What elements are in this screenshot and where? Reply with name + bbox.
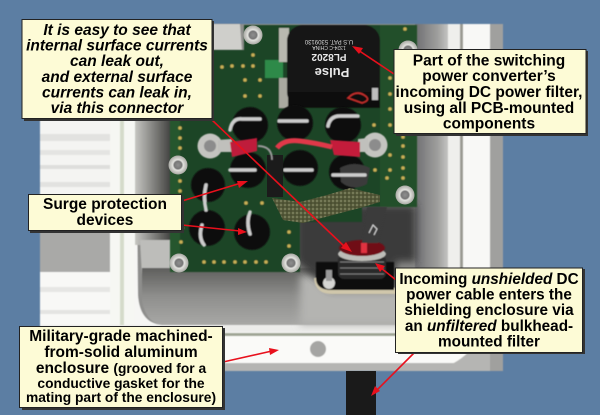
callout: military-grade enclosure: conductive gasket for the (37, 376, 205, 391)
arrow: surge callout to lower capacitor (182, 225, 247, 235)
callout: switching power converter filter: using all PCB-mounted (404, 100, 574, 117)
callout: military-grade enclosure: Military-grade machined- (29, 328, 213, 345)
callout: internal and external surface currents: currents can leak in, (42, 84, 192, 102)
solder pads (178, 27, 407, 264)
callout: surge protection devices: devices (77, 212, 133, 229)
photo: red power wire with ring terminals (198, 132, 388, 160)
arrow: enclosure callout to rim (223, 348, 279, 362)
callout: switching power converter filter (394, 50, 588, 136)
choke markings (304, 38, 353, 80)
callout: internal and external surface currents: and external surface (42, 69, 193, 86)
right rim (448, 24, 460, 324)
callout: surge protection devices: Surge protection (43, 196, 167, 213)
callout: unshielded DC power cable: mounted filter (438, 334, 540, 350)
bottom rim (40, 325, 490, 332)
choke markings: U.S PAT. 5309130 (304, 38, 353, 44)
photo: board mount screws (168, 26, 418, 272)
callout: internal and external surface currents: It is easy to see that (43, 22, 191, 39)
arrow: cable callout to cable (371, 353, 414, 396)
callout: surge protection devices (28, 194, 184, 233)
photo: braided ground strap (272, 188, 380, 223)
photo: top-left bracket (212, 24, 242, 50)
photo: bulkhead connector (314, 207, 400, 294)
callout: internal and external surface currents: can leak out, (70, 53, 164, 70)
callout: switching power converter filter: Part of the switching (413, 52, 565, 70)
choke markings: Pulse (315, 65, 349, 80)
choke markings: 1324-C CHINA (312, 44, 346, 50)
rim peg (310, 341, 326, 357)
photo: floor near connector (300, 275, 420, 325)
photo: aluminum enclosure (40, 24, 503, 371)
callout: unshielded DC power cable: Incoming unshielded DC (399, 271, 579, 288)
photo: black wire sleeve (267, 155, 283, 197)
cavity (135, 24, 440, 325)
callout: military-grade enclosure: mating part of the enclosure) (26, 390, 216, 405)
callout: unshielded DC power cable: power cable enters the (406, 286, 572, 304)
left rim (110, 120, 135, 325)
left flange stripes (40, 120, 112, 325)
callout: switching power converter filter: incoming DC power filter, (396, 84, 582, 101)
callout: military-grade enclosure (20, 326, 225, 410)
arrow: filter callout to choke (352, 46, 394, 74)
callout: unshielded DC power cable: an unfiltered bulkhead- (405, 318, 573, 335)
arrows (182, 46, 414, 396)
arrow: surge callout to upper capacitor (182, 181, 248, 201)
choke markings: PL8202 (311, 51, 347, 62)
callout: military-grade enclosure: from-solid aluminum (44, 344, 198, 361)
photo: external power cable (346, 371, 376, 415)
callout: military-grade enclosure: enclosure (grooved for a (36, 360, 206, 377)
photo: circuit board (170, 25, 417, 272)
callout: internal and external surface currents: via this connector (51, 100, 184, 117)
callout: unshielded DC power cable (396, 268, 585, 354)
arrow: cable callout to connector (375, 263, 396, 280)
callout: switching power converter filter: components (443, 116, 535, 132)
callout: unshielded DC power cable: shielding enclosure via (404, 302, 574, 319)
choke housing (279, 28, 289, 62)
callout: internal and external surface currents: internal surface currents (26, 38, 208, 54)
arrow: connector callout to connector (211, 119, 352, 252)
photo: surge protection capacitors (189, 105, 370, 250)
callout: switching power converter filter: power converter’s (422, 68, 556, 85)
callout: internal and external surface currents (22, 20, 214, 121)
photo: dark interior around connector (296, 205, 416, 290)
